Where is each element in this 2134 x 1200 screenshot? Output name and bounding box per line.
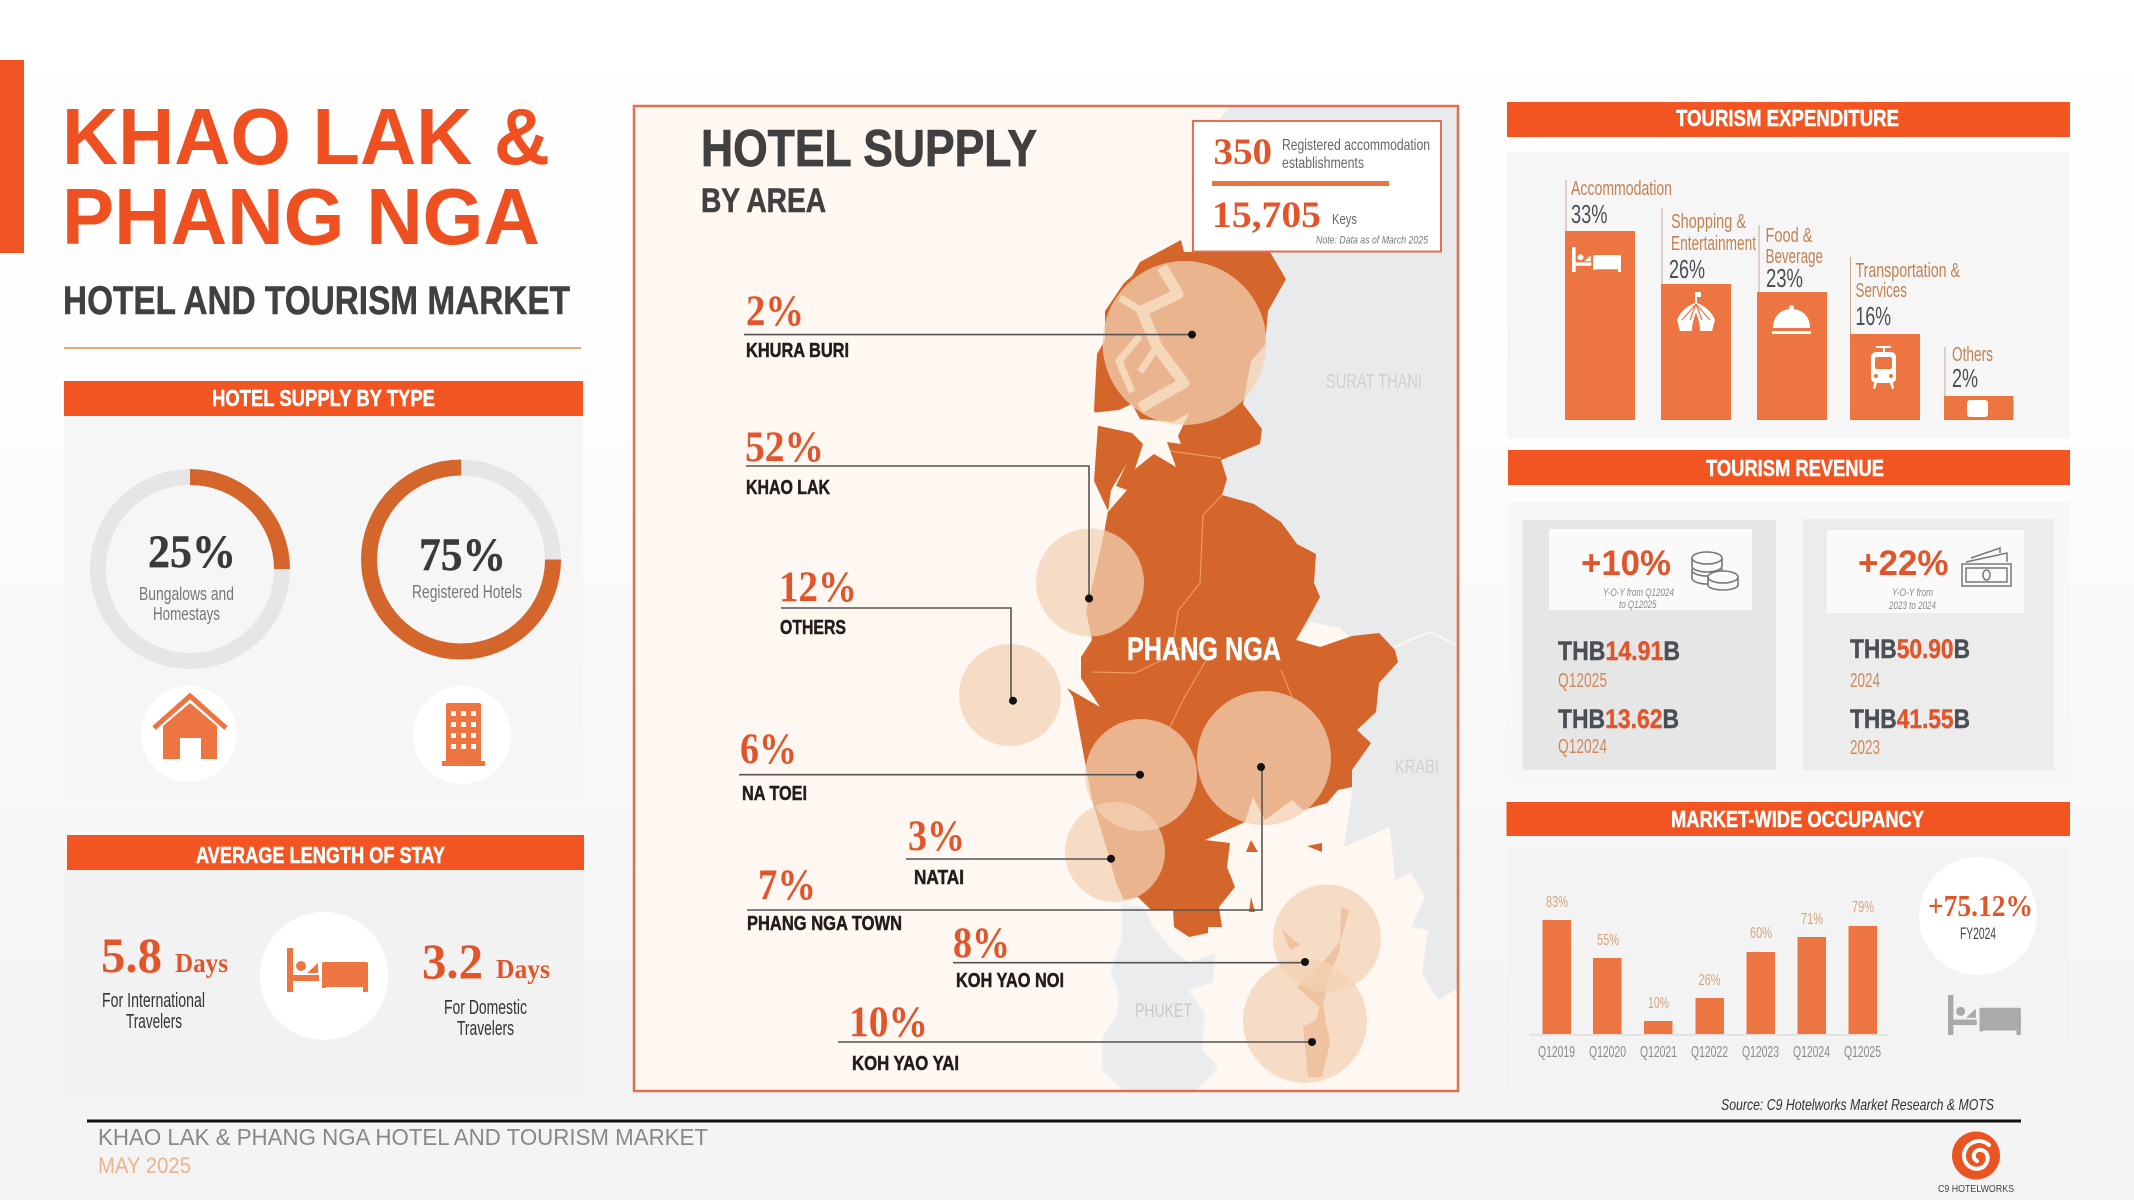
card: quarterly revenue: +10%: [1581, 544, 1671, 583]
panel: average length of stay: [65, 835, 584, 1099]
icon: bed in circle: [260, 912, 388, 1040]
label: Others 12%: OTHERS: [780, 617, 846, 639]
bar: others 2%: Others: [1952, 344, 1993, 366]
callout: +75.12% FY2024: FY2024: [1960, 924, 1996, 943]
card: quarterly revenue: [1522, 520, 1776, 770]
bar chart: occupancy by quarter: 83%: [1546, 894, 1568, 911]
donut: 25% bungalows and homestays: Homestays: [153, 604, 220, 624]
heading: market-wide occupancy: [1506, 802, 2070, 836]
label: Khura Buri 2%: KHURA BURI: [746, 340, 849, 362]
bar: others 2%: [1944, 344, 2014, 420]
bar: food and beverage 23%: Beverage: [1766, 246, 1823, 268]
bar chart: occupancy by quarter: [1530, 894, 1888, 1061]
stat: 5.8 days international: 5.8: [101, 927, 162, 983]
icon: bed: [1572, 247, 1621, 272]
panel: tourism expenditure: [1507, 102, 2070, 438]
heading: tourism expenditure: TOURISM EXPENDITURE: [1676, 105, 1899, 131]
donut: 75% registered hotels: [369, 468, 553, 652]
stat: 3.2 days domestic: Days: [496, 954, 550, 984]
bar chart: occupancy by quarter: 10%: [1648, 995, 1669, 1012]
heading: tourism expenditure: [1507, 102, 2070, 137]
map: regions: [1067, 106, 1458, 1092]
card: quarterly revenue: THB13.62B: [1558, 704, 1679, 734]
bar chart: occupancy by quarter: 26%: [1698, 972, 1720, 989]
bar: accommodation 33%: Accommodation: [1571, 178, 1672, 200]
stat: 5.8 days international: Travelers: [126, 1011, 182, 1033]
label: Khura Buri 2%: [746, 288, 849, 362]
bar: food and beverage 23%: Food &: [1766, 225, 1813, 247]
bar: food and beverage 23%: [1757, 225, 1827, 420]
bar: others 2%: 2%: [1952, 363, 1978, 393]
card: quarterly revenue: to Q12025: [1619, 599, 1657, 611]
heading: tourism revenue: TOURISM REVENUE: [1706, 455, 1884, 481]
donut: 25% bungalows and homestays: Bungalows and: [139, 584, 234, 604]
stat: 5.8 days international: For International: [102, 990, 205, 1012]
card: quarterly revenue: Y-O-Y from Q12024: [1603, 587, 1674, 599]
label: Khao Lak 52%: [745, 424, 830, 499]
map: leader lines: [739, 335, 1312, 1042]
logo: C9 Hotelworks: [1938, 1132, 2014, 1195]
callout: 350 establishments and 15,705 keys: Registered accommodation: [1282, 137, 1430, 154]
map: location dots: [1009, 331, 1316, 1046]
heading: hotel supply by area: HOTEL SUPPLY: [701, 120, 1037, 178]
bar: food and beverage 23%: 23%: [1766, 263, 1803, 293]
label: Others 12%: 12%: [779, 564, 857, 611]
card: quarterly revenue: THB14.91B: [1558, 636, 1680, 666]
bar chart: occupancy by quarter: Q12024: [1793, 1044, 1830, 1061]
icon: hotel building: [413, 686, 511, 784]
panel: hotel supply by type: [64, 381, 583, 796]
map: area bubbles: [959, 261, 1381, 1083]
heading: average length of stay: AVERAGE LENGTH OF STAY: [196, 842, 445, 868]
bar: shopping and entertainment 26%: 26%: [1669, 254, 1705, 284]
label: Phang Nga Town 7%: 7%: [758, 862, 816, 909]
icon: cloche: [1772, 305, 1811, 334]
stat: 5.8 days international: [101, 927, 228, 1033]
callout: 350 establishments and 15,705 keys: establishments: [1282, 155, 1364, 172]
icon: train: [1871, 346, 1896, 389]
label: Khao Lak 52%: KHAO LAK: [746, 477, 830, 499]
bar: shopping and entertainment 26%: Entertainment: [1671, 233, 1756, 255]
card: annual revenue: +22%: [1858, 544, 1948, 583]
donut: 75% registered hotels: 75%: [419, 529, 506, 581]
map label: region names: PHUKET: [1135, 1001, 1192, 1022]
bar chart: occupancy by quarter: 60%: [1750, 925, 1772, 942]
stat: 5.8 days international: Days: [175, 948, 228, 978]
bar chart: occupancy by quarter: Q12019: [1538, 1044, 1575, 1061]
heading: hotel supply by area: BY AREA: [701, 182, 826, 220]
icon: house: [141, 686, 237, 782]
icon: banknotes: [1962, 548, 2011, 586]
callout: 350 establishments and 15,705 keys: Note: Data as of March 2025: [1316, 234, 1429, 246]
source note: Source: C9 Hotelworks Market Research & MOTS: [1721, 1097, 1994, 1114]
heading: average length of stay: [67, 835, 584, 870]
label: Phang Nga Town 7%: [747, 862, 902, 935]
label: Natai 3%: NATAI: [914, 867, 964, 889]
label: Khura Buri 2%: 2%: [746, 288, 804, 335]
title: KHAO LAK &: [62, 92, 550, 181]
logo: C9 Hotelworks: C9 HOTELWORKS: [1938, 1184, 2014, 1195]
callout: +75.12% FY2024: +75.12%: [1928, 888, 2033, 923]
donut: 75% registered hotels: Registered Hotels: [412, 582, 522, 602]
panel: hotel supply by area map: [634, 106, 1459, 1092]
heading: hotel supply by type: HOTEL SUPPLY BY TYPE: [212, 385, 435, 411]
stat: 3.2 days domestic: For Domestic: [444, 997, 527, 1019]
heading: hotel supply by type: [64, 381, 583, 416]
stat: 3.2 days domestic: 3.2: [422, 933, 483, 989]
bar: shopping and entertainment 26%: Shopping &: [1671, 211, 1746, 233]
map label: region names: PHANG NGA: [1127, 631, 1281, 667]
icon: wallet: [1967, 400, 1988, 417]
label: Khao Lak 52%: 52%: [745, 424, 824, 471]
footer text: MAY 2025: [98, 1153, 191, 1178]
bar: accommodation 33%: [1565, 178, 1672, 420]
bar chart: occupancy by quarter: Q12020: [1589, 1044, 1626, 1061]
card: annual revenue: 2023 to 2024: [1888, 600, 1936, 612]
bar chart: occupancy by quarter: Q12025: [1844, 1044, 1881, 1061]
icon: coins: [1692, 552, 1738, 590]
panel: market-wide occupancy: [1506, 802, 2070, 1088]
heading: hotel supply by area: [701, 120, 1037, 220]
card: annual revenue: THB50.90B: [1850, 634, 1970, 664]
callout: 350 establishments and 15,705 keys: Keys: [1332, 211, 1357, 228]
card: annual revenue: THB41.55B: [1850, 704, 1970, 734]
heading: tourism revenue: [1508, 450, 2070, 485]
footer text: [98, 1124, 708, 1178]
callout: +75.12% FY2024: [1919, 857, 2037, 975]
heading: market-wide occupancy: MARKET-WIDE OCCUPANCY: [1671, 806, 1924, 832]
title: [62, 92, 550, 261]
panel: tourism revenue: [1507, 450, 2070, 783]
donut: 25% bungalows and homestays: 25%: [148, 526, 236, 578]
bar: transportation and services 16%: Transportation &: [1856, 260, 1960, 282]
label: Na Toei 6%: NA TOEI: [742, 783, 807, 805]
bar chart: occupancy by quarter: Q12021: [1640, 1044, 1677, 1061]
card: annual revenue: 2023: [1850, 737, 1880, 759]
label: Koh Yao Yai 10%: KOH YAO YAI: [852, 1053, 959, 1075]
bar chart: occupancy by quarter: 55%: [1597, 932, 1619, 949]
subtitle: HOTEL AND TOURISM MARKET: [63, 279, 570, 323]
card: quarterly revenue: Q12024: [1558, 736, 1607, 758]
callout: 350 establishments and 15,705 keys: 15,705: [1212, 195, 1321, 236]
label: Koh Yao Noi 8%: [953, 920, 1064, 992]
label: Koh Yao Noi 8%: KOH YAO NOI: [956, 970, 1064, 992]
callout: 350 establishments and 15,705 keys: 350: [1214, 132, 1272, 173]
bar chart: occupancy by quarter: 79%: [1852, 899, 1874, 916]
bar chart: occupancy by quarter: Q12022: [1691, 1044, 1728, 1061]
icon: tent: [1677, 292, 1715, 331]
card: annual revenue: [1803, 519, 2054, 770]
map label: region names: KRABI: [1395, 757, 1439, 778]
bar: shopping and entertainment 26%: [1661, 208, 1756, 420]
bar: accommodation 33%: 33%: [1571, 199, 1608, 229]
label: Na Toei 6%: 6%: [740, 726, 797, 773]
label: Koh Yao Yai 10%: [849, 999, 959, 1075]
bar: transportation and services 16%: [1850, 257, 1960, 420]
accent bar: [0, 60, 24, 253]
label: Koh Yao Yai 10%: 10%: [849, 999, 928, 1046]
label: Natai 3%: [908, 813, 965, 889]
label: Phang Nga Town 7%: PHANG NGA TOWN: [747, 913, 902, 935]
label: Others 12%: [779, 564, 857, 639]
stat: 3.2 days domestic: Travelers: [457, 1018, 514, 1040]
donut: 25% bungalows and homestays: [98, 477, 282, 661]
title: PHANG NGA: [62, 172, 540, 261]
icon: grey bed: [1948, 995, 2021, 1035]
card: annual revenue: Y-O-Y from: [1892, 587, 1933, 599]
card: quarterly revenue: Q12025: [1558, 670, 1607, 692]
label: Natai 3%: 3%: [908, 813, 965, 860]
label: Koh Yao Noi 8%: 8%: [953, 920, 1010, 967]
bar: transportation and services 16%: 16%: [1856, 301, 1891, 331]
callout: 350 establishments and 15,705 keys: [1193, 121, 1441, 252]
bar chart: occupancy by quarter: Q12023: [1742, 1044, 1779, 1061]
bar chart: occupancy by quarter: 71%: [1801, 911, 1823, 928]
map label: region names: [1127, 371, 1439, 1022]
footer text: KHAO LAK & PHANG NGA HOTEL AND TOURISM MARKET: [98, 1124, 708, 1150]
stat: 3.2 days domestic: [422, 933, 550, 1040]
card: annual revenue: 2024: [1850, 670, 1880, 692]
label: Na Toei 6%: [740, 726, 807, 805]
bar: transportation and services 16%: Services: [1856, 280, 1907, 302]
map label: region names: SURAT THANI: [1326, 371, 1422, 393]
